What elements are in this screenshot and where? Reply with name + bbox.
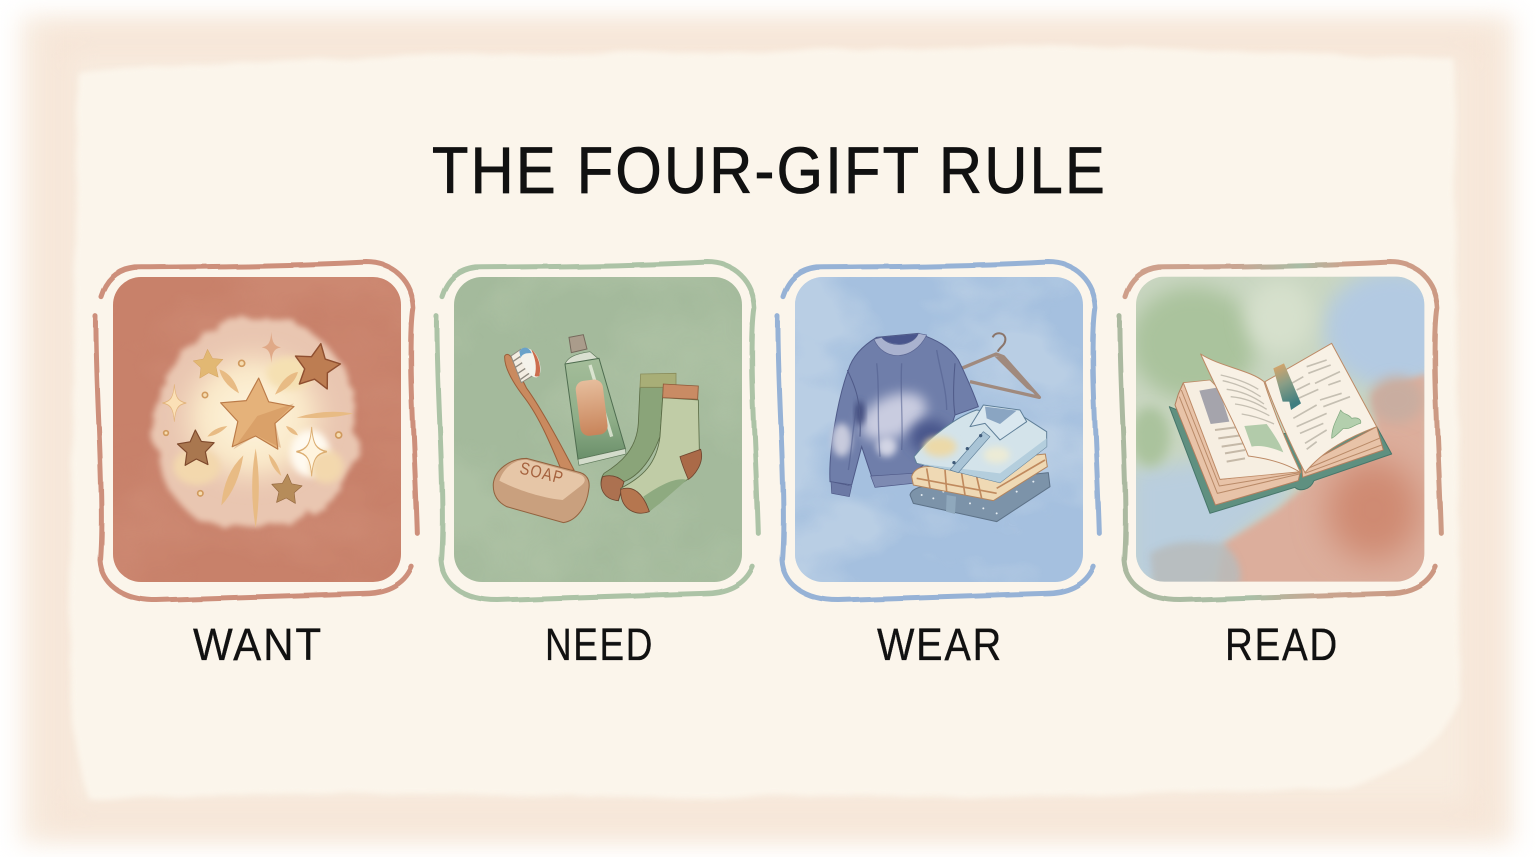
icon: clothes [830,333,1050,522]
read label: READ [1225,619,1339,670]
wear watercolor card [795,277,1083,582]
sparkles [162,332,327,476]
panel: want [96,262,417,670]
need label: NEED [545,619,654,670]
panel: need [437,262,758,670]
icon: open book [1169,343,1392,513]
want watercolor card [113,277,401,582]
glow [155,321,358,527]
stars [177,340,343,504]
panel: read [1120,262,1463,670]
toothpaste tube [565,335,626,465]
cover [1169,407,1392,513]
bookmark [1273,363,1301,410]
hanger [962,333,1039,397]
read frame [1120,262,1441,600]
need frame [437,262,758,600]
wear label: WEAR [877,619,1003,670]
need watercolor card [454,277,742,582]
rays [207,369,353,528]
want label: WANT [193,619,323,670]
icon: toiletries and socks [493,335,702,523]
turned page [1201,354,1301,473]
panel: wear [778,262,1099,670]
icon: stars burst [155,321,358,528]
left page [1183,380,1301,479]
read watercolor card [1136,276,1424,582]
sweater [830,333,978,497]
soap [493,458,589,523]
soap: SOAP [518,458,566,488]
want frame [96,262,417,600]
map sketch [1332,410,1361,438]
title: THE FOUR-GIFT RULE [432,133,1107,207]
toothbrush [505,348,574,472]
dots [164,360,342,496]
wear frame [778,262,1099,600]
left page block [1175,383,1301,505]
shirt stack [910,405,1050,522]
right page block [1302,427,1383,477]
right page [1265,343,1377,473]
socks [601,373,702,513]
